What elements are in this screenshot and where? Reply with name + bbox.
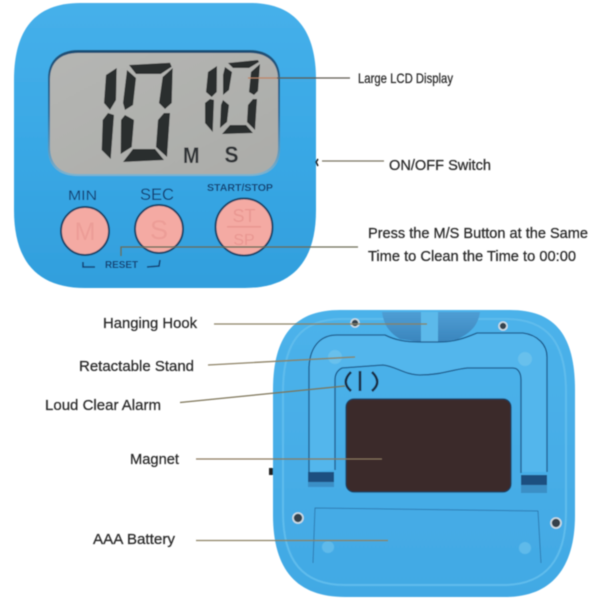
label: reset instructions: Time to Clean the Time to 00:00 [368,249,576,265]
label: Loud Clear Alarm: Loud Clear Alarm [45,397,161,414]
label: Hanging Hook: Hanging Hook [103,315,197,332]
button ST/SP: SP [233,232,255,249]
button labels [68,183,273,271]
alarm speaker symbol [346,371,377,391]
label: reset instructions [368,226,588,265]
unit labels M and S: M [183,143,200,168]
minutes digits 10 [102,63,173,162]
button labels: MIN [68,187,97,203]
unit labels M and S [183,142,238,168]
button labels: SEC [140,185,174,204]
screws [293,319,561,528]
switch notch [316,159,318,166]
button S: S [150,215,168,245]
button labels: RESET [105,260,138,271]
retractable stand [309,333,547,473]
unit labels M and S: S [224,142,238,168]
reset bracket [83,260,160,267]
seconds digits 10 [205,60,260,134]
hanging hook [382,312,480,343]
callout labels [45,70,588,548]
button ST/SP [216,198,272,256]
button M [61,207,109,255]
panel: timer back view [269,310,575,597]
label: Magnet: Magnet [130,451,180,468]
leader lines [121,78,427,540]
timer front body [14,3,316,288]
stand feet [308,472,547,493]
label: Large LCD Display: Large LCD Display [358,70,453,86]
button S [135,205,183,253]
timer back body [273,310,575,597]
label: reset instructions: Press the M/S Button at the Same [368,226,588,242]
magnet [346,399,511,492]
stand pegs [328,350,532,366]
button labels: START/STOP [207,183,273,194]
label: ON/OFF Switch: ON/OFF Switch [389,157,491,174]
label: AAA Battery: AAA Battery [93,531,176,548]
label: Retactable Stand: Retactable Stand [79,358,194,375]
side notch [269,468,273,475]
button ST/SP: ST [232,206,256,226]
panel: timer front view [14,3,318,288]
battery cover [313,508,541,563]
LCD display [48,50,280,176]
button M: M [75,218,95,246]
